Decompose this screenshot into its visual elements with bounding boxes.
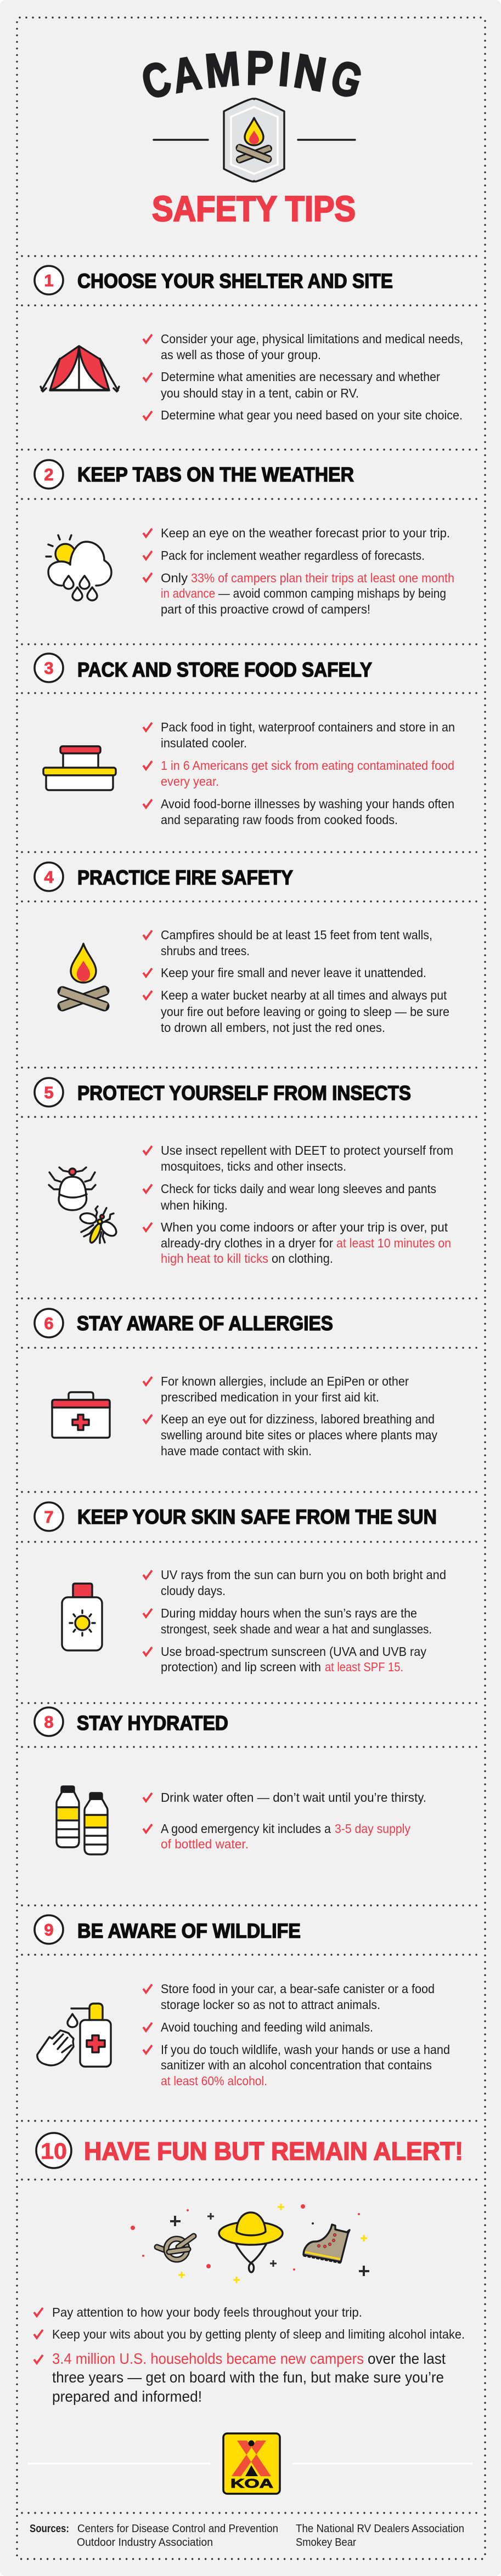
list: tip 6 text: prescribed medication in your first aid kit. bbox=[161, 1390, 379, 1404]
heading 5: PROTECT YOURSELF FROM INSECTS bbox=[77, 1082, 411, 1104]
number badge 1: 1 bbox=[44, 271, 54, 290]
list: tip 9 text: sanitizer with an alcohol concentration that contains bbox=[161, 2058, 432, 2072]
icon: hiking boot bbox=[303, 2225, 350, 2263]
list: tip 1 text: Consider your age, physical limitations and medical needs, bbox=[161, 332, 463, 346]
number badge 7 bbox=[35, 1502, 63, 1531]
sources: Smokey Bear bbox=[296, 2536, 356, 2549]
list: tip 9 text: If you do touch wildlife, wash your hands or use a hand bbox=[161, 2042, 450, 2057]
logo: KOA bbox=[28, 2433, 472, 2494]
list: tip 5 text: high heat to kill ticks bbox=[161, 1251, 268, 1266]
heading 9: BE AWARE OF WILDLIFE bbox=[77, 1920, 301, 1942]
heading 2: KEEP TABS ON THE WEATHER bbox=[77, 463, 354, 486]
list: tip 9 text: Avoid touching and feeding wild animals. bbox=[161, 2020, 373, 2034]
list: tip 3 text bbox=[143, 720, 455, 827]
list: tip 6 text: swelling around bite sites or places where plants may bbox=[161, 1428, 437, 1442]
list: tip 6 text: For known allergies, include an EpiPen or other bbox=[161, 1374, 409, 1388]
list: tip 7 text bbox=[143, 1568, 446, 1674]
number badge 6 bbox=[35, 1309, 63, 1337]
list: tip 5 text: mosquitoes, ticks and other insects. bbox=[161, 1159, 346, 1173]
panel: tip 10 have fun bbox=[34, 2133, 465, 2405]
number badge 5: 5 bbox=[44, 1083, 54, 1102]
number badge 10: 10 bbox=[41, 2138, 67, 2164]
list: tip 1 text bbox=[143, 332, 463, 422]
list: tip 2 text: Pack for inclement weather regardless of forecasts. bbox=[161, 548, 425, 563]
list: tip 7 text: at least SPF 15. bbox=[325, 1660, 403, 1674]
number badge 9 bbox=[35, 1915, 63, 1944]
list: tip 2 text: in advance bbox=[161, 586, 215, 600]
list: tip 8 text: of bottled water. bbox=[161, 1837, 249, 1851]
list: tip 4 text: Campfires should be at least 15 feet from tent walls, bbox=[161, 928, 432, 942]
panel: tip 1 shelter bbox=[35, 266, 463, 422]
list: tip 7 text: Use broad-spectrum sunscreen (UVA and UVB ray bbox=[161, 1644, 426, 1659]
list: tip 10 text: prepared and informed! bbox=[52, 2388, 202, 2405]
list: tip 2 text bbox=[143, 526, 454, 616]
list: tip 10 text: over the last bbox=[368, 2350, 446, 2367]
list: tip 8 text bbox=[143, 1790, 426, 1851]
list: tip 5 text: Check for ticks daily and wear long sleeves and pants bbox=[161, 1182, 436, 1196]
panel: tip 7 sun bbox=[35, 1502, 446, 1674]
list: tip 5 text: When you come indoors or after your trip is over, put bbox=[161, 1220, 448, 1234]
list: tip 10 text: Pay attention to how your body feels throughout your trip. bbox=[52, 2305, 362, 2319]
heading 8: STAY HYDRATED bbox=[77, 1712, 228, 1734]
list: tip 1 text: Determine what gear you need based on your site choice. bbox=[161, 408, 463, 422]
number badge 4: 4 bbox=[44, 867, 54, 887]
list: tip 7 text: cloudy days. bbox=[161, 1584, 226, 1598]
list: tip 10 text: 3.4 million U.S. households became new campers bbox=[52, 2350, 364, 2367]
icon: tent bbox=[41, 346, 119, 391]
number badge 3 bbox=[35, 654, 63, 682]
icon: campfire badge bbox=[154, 99, 355, 181]
icon: water bottles bbox=[57, 1786, 108, 1854]
list: tip 9 text: Store food in your car, a bear-safe canister or a food bbox=[161, 1982, 435, 1996]
decorative confetti bbox=[131, 2204, 369, 2283]
list: tip 3 text: Pack food in tight, waterproof containers and store in an bbox=[161, 720, 455, 734]
list: tip 8 text: A good emergency kit includes a bbox=[161, 1822, 331, 1836]
list: tip 1 text: Determine what amenities are necessary and whether bbox=[161, 370, 440, 384]
heading 1: CHOOSE YOUR SHELTER AND SITE bbox=[77, 270, 393, 292]
panel: tip 3 food bbox=[35, 654, 455, 827]
list: tip 3 text: every year. bbox=[161, 774, 219, 788]
list: tip 10 text: Keep your wits about you by getting plenty of sleep and limiting alcohol intake. bbox=[52, 2327, 465, 2341]
number badge 1 bbox=[35, 266, 63, 294]
list: tip 2 text: Keep an eye on the weather forecast prior to your trip. bbox=[161, 526, 450, 540]
list: tip 2 text: — avoid common camping mishaps by being bbox=[218, 586, 446, 600]
icon: sunscreen bottle bbox=[62, 1584, 102, 1650]
heading 7: KEEP YOUR SKIN SAFE FROM THE SUN bbox=[77, 1506, 437, 1528]
panel: tip 8 hydration bbox=[35, 1707, 426, 1854]
list: tip 6 text: Keep an eye out for dizziness, labored breathing and bbox=[161, 1412, 435, 1426]
list: tip 2 text: Only bbox=[161, 571, 188, 585]
number badge 5 bbox=[35, 1078, 63, 1107]
title: camping: N bbox=[290, 43, 330, 102]
title: safety tips: SAFETY TIPS bbox=[152, 189, 356, 229]
number badge 9: 9 bbox=[44, 1920, 54, 1939]
icons: rope knot, hat and boot bbox=[131, 2204, 369, 2283]
title: camping: I bbox=[277, 43, 292, 97]
number badge 2: 2 bbox=[44, 465, 54, 484]
title: camping: A bbox=[168, 46, 205, 103]
sources: Sources: bbox=[30, 2522, 69, 2535]
list: tip 4 text: Keep a water bucket nearby at all times and always put bbox=[161, 988, 447, 1002]
list: tip 4 text: shrubs and trees. bbox=[161, 944, 250, 958]
list: tip 4 text: your fire out before leaving or going to sleep — be sure bbox=[161, 1005, 449, 1019]
list: tip 9 text bbox=[143, 1982, 450, 2088]
list: tip 9 text: at least 60% alcohol. bbox=[161, 2074, 267, 2088]
list: tip 5 text: on clothing. bbox=[272, 1251, 333, 1266]
heading 4: PRACTICE FIRE SAFETY bbox=[77, 866, 293, 889]
list: tip 7 text: During midday hours when the sun’s rays are the bbox=[161, 1606, 417, 1620]
list: tip 5 text: when hiking. bbox=[160, 1198, 228, 1212]
panel: tip 2 weather bbox=[35, 460, 454, 616]
icon: campfire bbox=[63, 944, 104, 1006]
list: tip 8 text: 3-5 day supply bbox=[335, 1822, 410, 1836]
list: tip 3 text: and separating raw foods from cooked foods. bbox=[161, 813, 398, 827]
list: tip 10 text bbox=[34, 2305, 465, 2405]
number badge 6: 6 bbox=[44, 1314, 54, 1333]
list: tip 2 text: part of this proactive crowd of campers! bbox=[161, 602, 370, 616]
title: camping: P bbox=[246, 42, 274, 95]
icon: hand sanitizer and hand bbox=[37, 2004, 111, 2067]
list: tip 9 text: storage locker so as not to attract animals. bbox=[161, 1998, 380, 2012]
icon: tick and mosquito bbox=[49, 1167, 119, 1244]
title: camping: G bbox=[325, 49, 368, 109]
sources: Outdoor Industry Association bbox=[77, 2536, 213, 2549]
heading 3: PACK AND STORE FOOD SAFELY bbox=[77, 659, 372, 681]
number badge 2 bbox=[35, 460, 63, 489]
list: tip 1 text: as well as those of your group. bbox=[161, 348, 321, 362]
list: tip 5 text: at least 10 minutes on bbox=[336, 1236, 451, 1250]
list: tip 3 text: insulated cooler. bbox=[161, 736, 247, 750]
list: tip 4 text: to drown all embers, not just the red ones. bbox=[161, 1020, 385, 1035]
list: tip 1 text: you should stay in a tent, cabin or RV. bbox=[161, 386, 359, 400]
icon: sun hat bbox=[219, 2212, 283, 2272]
number badge 8 bbox=[35, 1707, 63, 1736]
icon: food containers bbox=[43, 746, 116, 790]
icon: rope knot bbox=[157, 2236, 194, 2260]
number badge 10 bbox=[36, 2133, 71, 2168]
list: tip 5 text bbox=[143, 1143, 453, 1266]
list: tip 5 text: already-dry clothes in a dryer for bbox=[161, 1236, 333, 1250]
list: tip 8 text: Drink water often — don’t wait until you’re thirsty. bbox=[161, 1790, 426, 1805]
number badge 3: 3 bbox=[44, 659, 54, 678]
number badge 7: 7 bbox=[44, 1507, 54, 1527]
list: tip 4 text: Keep your fire small and never leave it unattended. bbox=[161, 966, 426, 980]
sources: Centers for Disease Control and Prevention bbox=[77, 2522, 278, 2535]
number badge 4 bbox=[35, 863, 63, 891]
panel: tip 5 insects bbox=[35, 1078, 453, 1266]
sources: The National RV Dealers Association bbox=[296, 2522, 464, 2535]
list: tip 10 text: three years — get on board with the fun, but make sure you’re bbox=[52, 2369, 444, 2386]
icon: first aid kit bbox=[52, 1392, 110, 1438]
title: camping bbox=[136, 42, 368, 110]
list: tip 3 text: 1 in 6 Americans get sick from eating contaminated food bbox=[161, 758, 454, 773]
list: tip 6 text bbox=[143, 1374, 437, 1458]
list: tip 3 text: Avoid food-borne illnesses by washing your hands often bbox=[161, 797, 454, 811]
title: camping: C bbox=[136, 50, 177, 110]
list: tip 5 text: Use insect repellent with DEET to protect yourself from bbox=[161, 1143, 453, 1158]
list: tip 6 text: have made contact with skin. bbox=[161, 1444, 312, 1458]
list: tip 7 text: strongest, seek shade and wear a hat and sunglasses. bbox=[161, 1622, 432, 1636]
list: tip 7 text: protection) and lip screen with bbox=[161, 1660, 321, 1674]
panel: tip 6 allergies bbox=[35, 1309, 437, 1458]
logo: KOA: KOA bbox=[230, 2476, 273, 2490]
list: tip 4 text bbox=[143, 928, 449, 1035]
title block bbox=[136, 42, 368, 229]
panel: tip 9 wildlife bbox=[35, 1915, 450, 2088]
sources bbox=[30, 2522, 464, 2549]
heading 10: HAVE FUN BUT REMAIN ALERT! bbox=[84, 2137, 463, 2165]
heading 6: STAY AWARE OF ALLERGIES bbox=[77, 1312, 333, 1335]
list: tip 7 text: UV rays from the sun can burn you on both bright and bbox=[161, 1568, 446, 1582]
title: camping: M bbox=[203, 42, 242, 98]
list: tip 2 text: 33% of campers plan their trips at least one month bbox=[191, 571, 454, 585]
panel: tip 4 fire bbox=[35, 863, 449, 1035]
number badge 8: 8 bbox=[44, 1712, 54, 1732]
icon: sun, cloud and rain bbox=[46, 535, 111, 600]
